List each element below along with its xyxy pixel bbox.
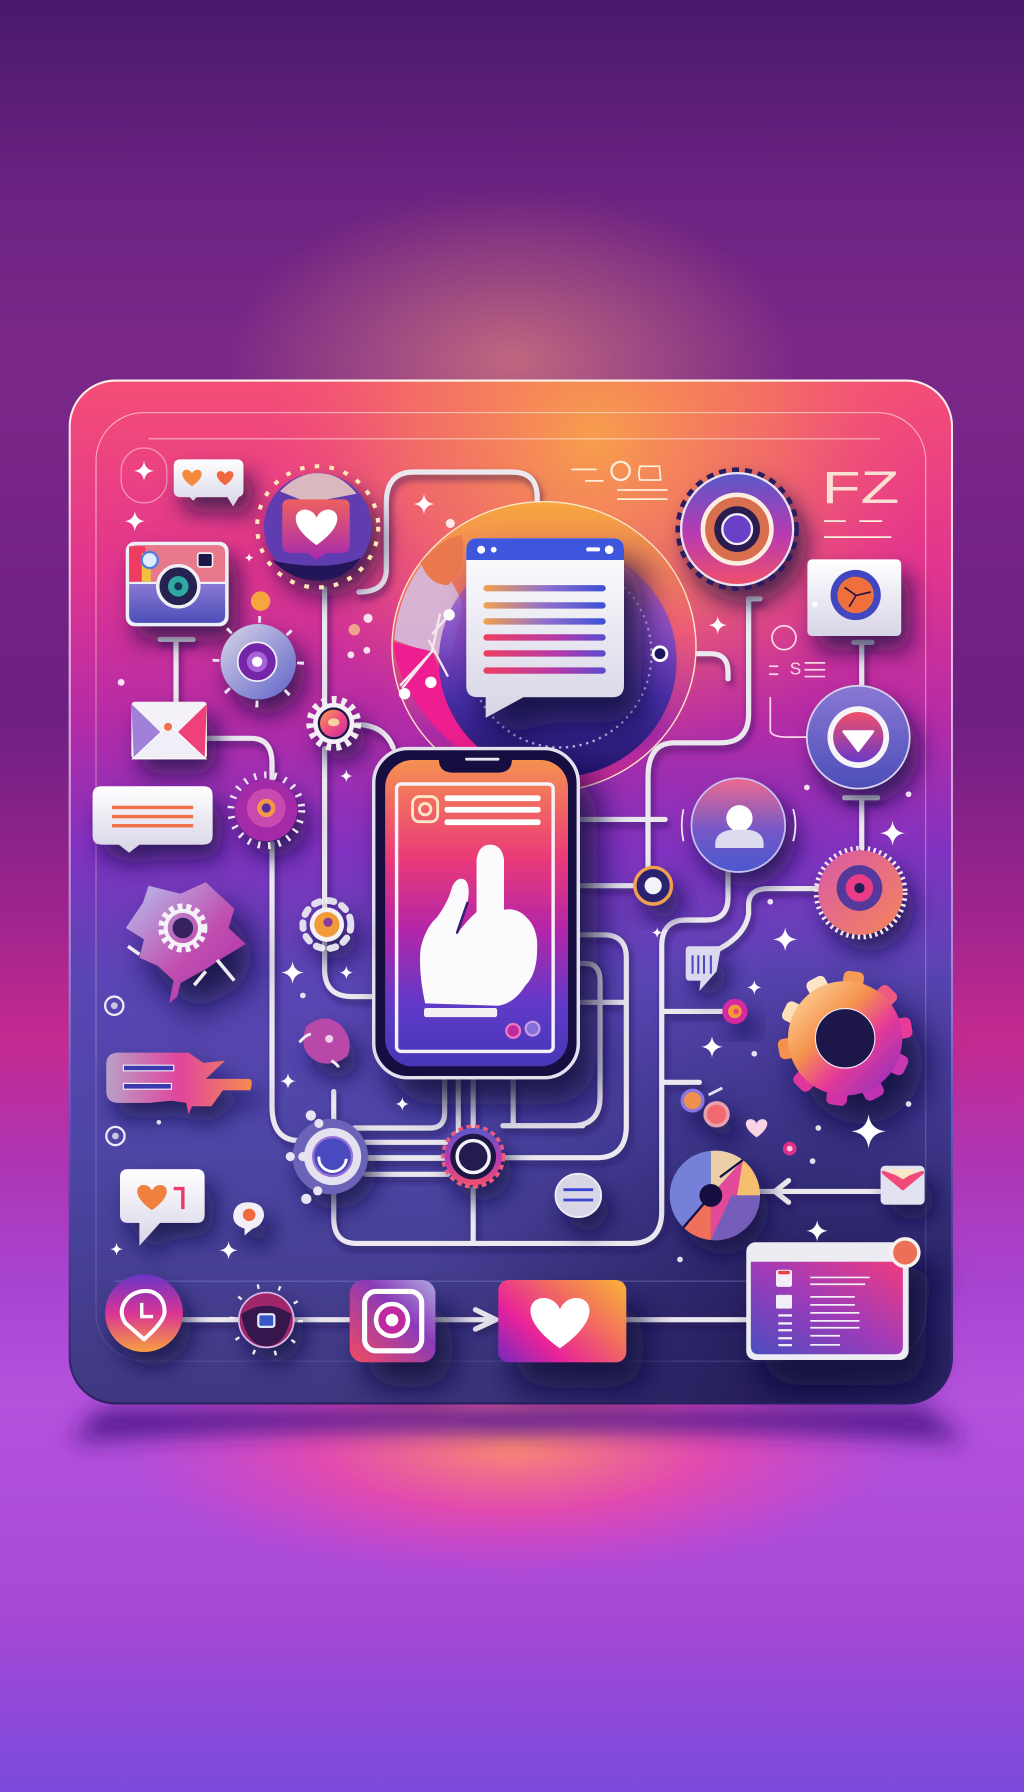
black ring gear (445, 1128, 502, 1185)
top-right ring gear (680, 472, 794, 586)
top-right caption marks (571, 462, 899, 537)
settings blob (126, 882, 246, 1003)
instagram icon (350, 1280, 435, 1362)
line node (635, 867, 671, 904)
burst node (303, 901, 351, 949)
top-right caption marks: FZ (822, 462, 899, 513)
donut chart (670, 1151, 760, 1240)
screen badges (506, 1022, 539, 1038)
post text lines (445, 795, 541, 825)
pointing hand (420, 845, 537, 1017)
small creature blob (299, 1019, 350, 1067)
envelope icon (131, 702, 207, 759)
sparkles (110, 461, 905, 1259)
connector lines (160, 472, 880, 1329)
small orange node (722, 999, 747, 1024)
phone (374, 749, 578, 1078)
bottom-right document window (746, 1239, 919, 1360)
node satellite dots (286, 1110, 323, 1204)
pin bubble (233, 1202, 264, 1235)
message card (93, 786, 213, 853)
purple burst gear (231, 775, 302, 846)
small message bubble (686, 946, 721, 991)
orange dot (251, 591, 270, 611)
magenta caption marks: S (790, 658, 801, 678)
small status icons (105, 997, 797, 1155)
speech hand shape (106, 1053, 252, 1114)
cluster of small rings (682, 1088, 728, 1126)
camera icon (126, 542, 229, 626)
spiked pink gear (817, 849, 904, 936)
triangle badge circle (807, 686, 910, 789)
heart badge (257, 466, 378, 587)
check envelope (881, 1166, 925, 1205)
small gear node (311, 701, 357, 746)
equals pill (555, 1174, 601, 1217)
heart comment bubble (120, 1169, 205, 1246)
window text lines (483, 585, 606, 674)
globe behind window (392, 502, 696, 792)
scattered dots (118, 519, 911, 1262)
document list (776, 1270, 870, 1346)
clock card (807, 559, 901, 636)
location badge circle (105, 1274, 183, 1352)
window control dots (477, 545, 613, 554)
main panel (70, 381, 952, 1403)
big gear (777, 970, 913, 1106)
bubble with two hearts (174, 459, 243, 506)
lens gear (216, 619, 301, 704)
connector node on globe (653, 647, 667, 661)
chat window card (466, 538, 624, 718)
central swirl node (286, 1110, 368, 1204)
instagram mini icon (413, 797, 438, 822)
camera node (232, 1286, 301, 1354)
magenta caption marks (769, 626, 825, 737)
heart button (498, 1280, 626, 1362)
user profile circle (682, 778, 795, 872)
